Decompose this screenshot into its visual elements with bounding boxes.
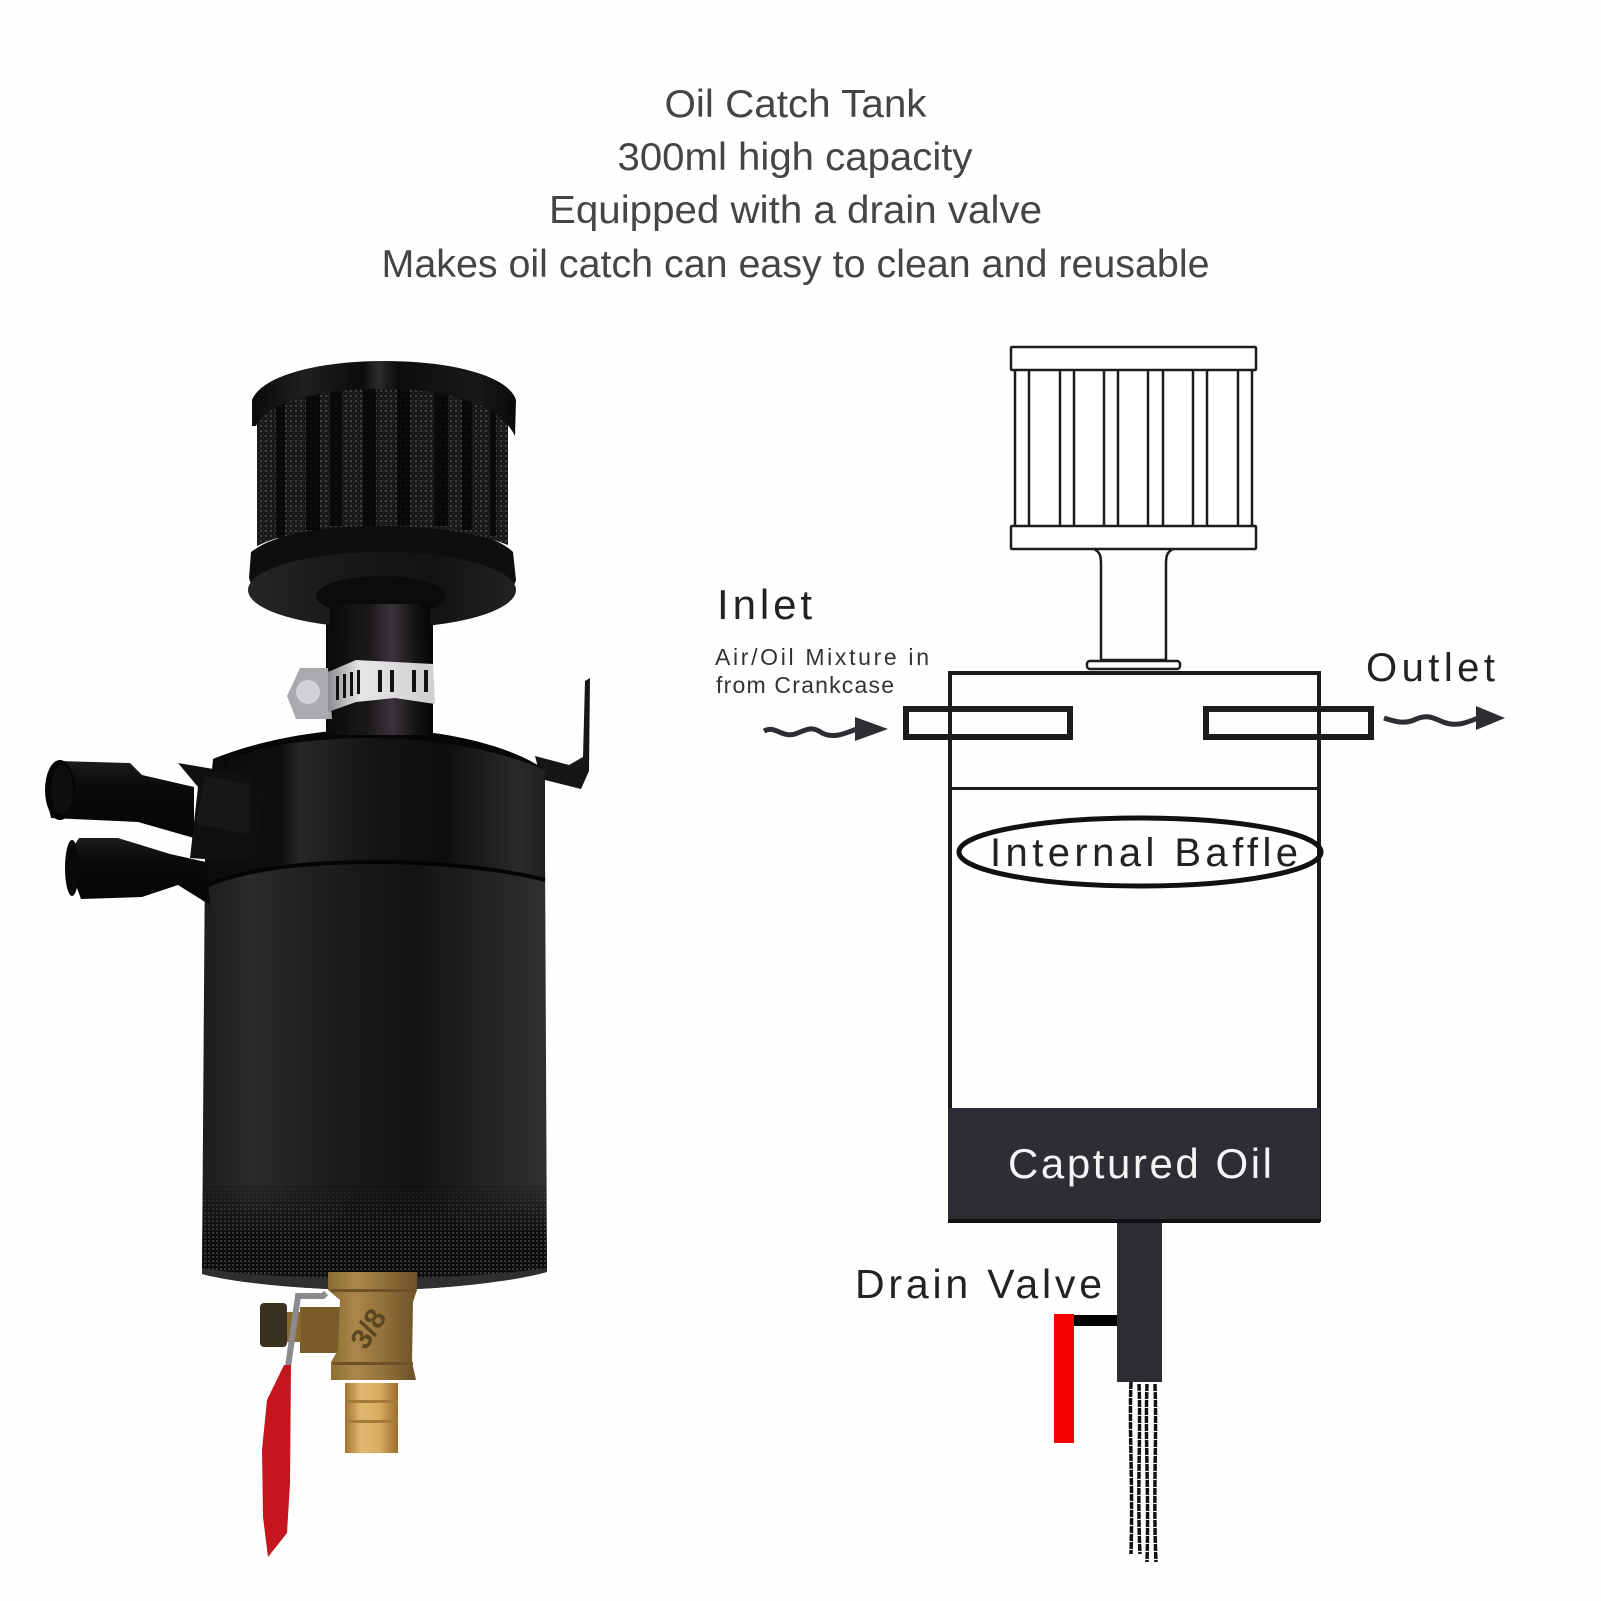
- breather stem: [326, 600, 433, 735]
- valve red handle: [262, 1365, 291, 1557]
- internal baffle callout: Internal Baffle: [990, 831, 1298, 875]
- breather filter top cap: [252, 361, 516, 436]
- tank base rim: [202, 1268, 547, 1290]
- tank seam: [207, 862, 545, 886]
- inlet heading: Inlet: [717, 581, 812, 628]
- schematic valve stem: [1074, 1315, 1117, 1326]
- draining oil lines: [1130, 1382, 1156, 1562]
- captured oil panel: [948, 1108, 1320, 1223]
- brass size marking: 3/8: [345, 1304, 393, 1355]
- drain valve label: Drain Valve: [855, 1261, 1102, 1307]
- tank lower section: [202, 850, 547, 1290]
- title text block: 300ml high capacity: [618, 136, 973, 179]
- captured oil panel: Captured Oil: [1008, 1140, 1272, 1187]
- lower barb fitting: [65, 838, 210, 905]
- hose clamp: [287, 660, 435, 719]
- inlet description: Air/Oil Mixture in: [715, 644, 929, 670]
- diagram: oil catch tank schematic: [715, 347, 1505, 1562]
- outlet tube: [1206, 709, 1371, 737]
- schematic drain pipe: [1117, 1223, 1162, 1382]
- brass hose barb: [345, 1383, 398, 1453]
- inlet description: from Crankcase: [716, 672, 894, 698]
- internal baffle callout: [959, 818, 1321, 886]
- tank divider line: [950, 787, 1319, 790]
- breather filter lower cap: [248, 524, 516, 628]
- schematic red handle: [1054, 1314, 1074, 1443]
- breather filter mesh: [257, 372, 508, 546]
- stem collar: [330, 604, 430, 640]
- tank top rim: [213, 729, 545, 770]
- inlet arrow: [764, 717, 888, 741]
- tank upper section: [205, 729, 545, 886]
- product photo: oil catch tank: [45, 361, 590, 1557]
- outlet arrow: [1384, 706, 1505, 730]
- inlet tube: [906, 709, 1070, 737]
- upper barb fitting: [45, 760, 194, 838]
- drain valve brass body: [260, 1272, 417, 1380]
- title text block: Makes oil catch can easy to clean and reusable: [382, 243, 1210, 286]
- schematic breather filter: [1011, 347, 1256, 669]
- title text block: Oil Catch Tank: [664, 83, 927, 126]
- knurled base: [202, 1185, 547, 1278]
- title text block: Equipped with a drain valve: [549, 189, 1042, 232]
- outlet heading: Outlet: [1366, 646, 1495, 690]
- valve lever arm: [288, 1293, 326, 1367]
- mounting bracket: [535, 678, 590, 789]
- hex nut fitting: [178, 763, 263, 862]
- title text block: [382, 83, 1210, 286]
- inlet description: [715, 644, 929, 698]
- schematic tank body: [950, 673, 1319, 1220]
